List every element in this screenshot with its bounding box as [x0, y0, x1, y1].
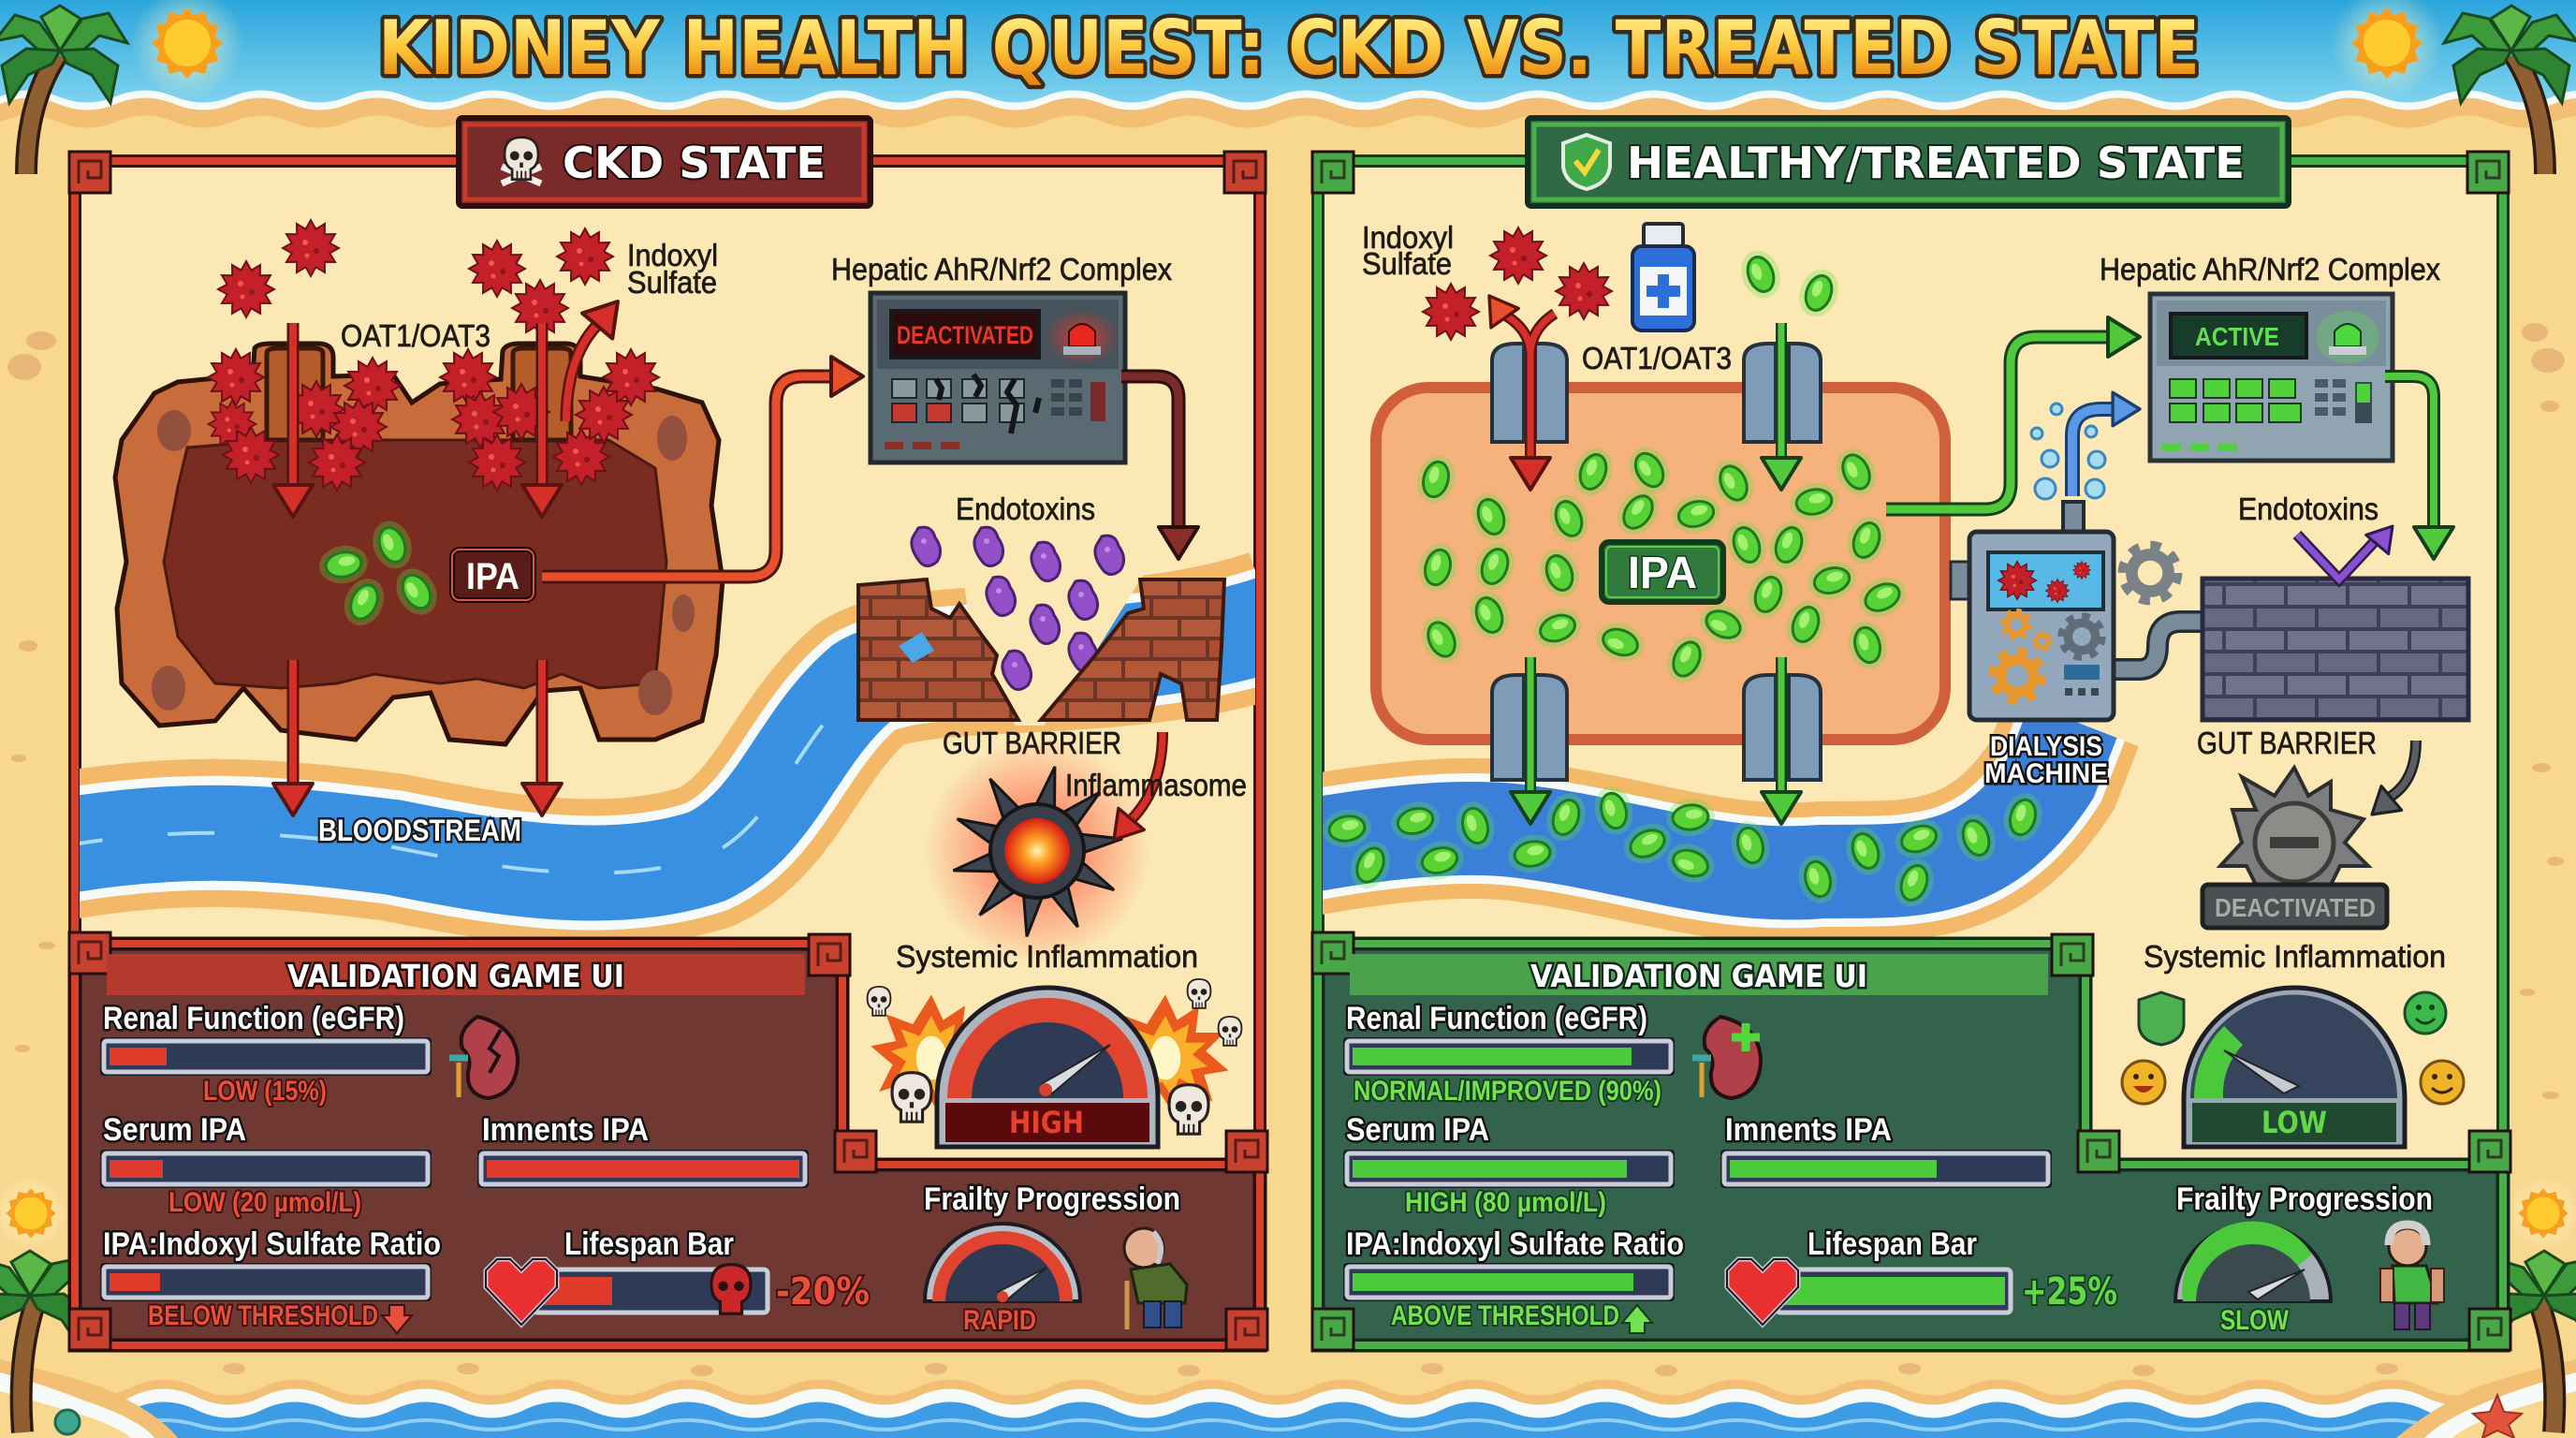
arrow: hepatic complex to gut barrier [2385, 376, 2453, 559]
dialysis bubbles and clean flow arrow [2031, 392, 2140, 499]
stat: serum IPA: HIGH (80 µmol/L) [1405, 1187, 1606, 1218]
stat: lifespan bar: -20% [776, 1270, 870, 1313]
frailty progression [924, 1181, 1180, 1336]
indoxyl sulfate toxins [1423, 227, 1612, 340]
icon: skull and crossbones [502, 138, 541, 183]
label: IPA badge [452, 550, 534, 600]
icon: green shell [55, 1410, 80, 1434]
icon: activated inflammasome [925, 739, 1149, 963]
kidney cell: healthy [1372, 384, 1949, 743]
panel: CKD validation game UI [69, 932, 1267, 1350]
label: OAT1/OAT3: OAT1/OAT3 [341, 318, 490, 353]
gauge: systemic inflammation high: HIGH [1009, 1105, 1084, 1140]
label: dialysis machine [1984, 731, 2108, 789]
panel frame and parchment [69, 152, 1266, 1345]
icon: palm tree top left [0, 6, 127, 174]
endotoxin blobs [912, 527, 1124, 690]
dialysis machine [1951, 502, 2204, 720]
stat: renal function [1343, 1001, 1675, 1107]
label: hepatic complex: Hepatic AhR/Nrf2 Complex [831, 252, 1172, 286]
OAT transporters [1492, 344, 1821, 780]
UI header: VALIDATION GAME UI [287, 958, 624, 994]
stat: IPA to indoxyl sulfate ratio [100, 1226, 441, 1333]
stat: lifespan bar [1727, 1226, 2117, 1325]
panel: healthy/treated state [1310, 118, 2510, 1350]
stat: renal function: Renal Function (eGFR) [103, 1001, 404, 1036]
stat: IPA to indoxyl sulfate ratio: IPA:Indoxyl Sulfate Ratio [1346, 1226, 1684, 1262]
label: indoxyl sulfate [1362, 220, 1454, 281]
stat: imnents IPA [477, 1112, 809, 1188]
gauge: systemic inflammation low: Systemic Inflammation [2144, 939, 2446, 974]
gut barrier wall intact [2203, 579, 2468, 720]
stat: renal function: NORMAL/IMPROVED (90%) [1354, 1076, 1661, 1107]
frailty progression: Frailty Progression [924, 1181, 1180, 1217]
stat: imnents IPA [1720, 1112, 2052, 1188]
UI header: VALIDATION GAME UI [1530, 958, 1867, 994]
stat: IPA to indoxyl sulfate ratio: IPA:Indoxyl Sulfate Ratio [103, 1226, 441, 1262]
label: bloodstream: BLOODSTREAM [318, 814, 521, 847]
label: dialysis machine: MACHINE [1984, 758, 2108, 789]
IPA bacteria [316, 516, 445, 632]
arrow: gut barrier to inflammasome [1101, 732, 1163, 850]
icon: damaged kidney [449, 1017, 518, 1098]
gauge: systemic inflammation high: Systemic Inflammation [896, 939, 1198, 974]
frailty progression: SLOW [2220, 1305, 2290, 1336]
indoxyl sulfate toxins [208, 220, 659, 491]
label: IPA badge [1602, 542, 1723, 602]
stat: lifespan bar [486, 1226, 870, 1325]
stat: serum IPA: LOW (20 µmol/L) [168, 1187, 361, 1218]
control panel: active: ACTIVE [2195, 322, 2279, 351]
stat: lifespan bar: +25% [2022, 1270, 2117, 1313]
label: gut barrier: GUT BARRIER [2197, 726, 2377, 760]
stat: IPA to indoxyl sulfate ratio: BELOW THRESHOLD [148, 1300, 378, 1331]
panel: CKD state [56, 118, 1273, 1350]
bloodstream river [1310, 721, 2073, 873]
badge: healthy/treated state: HEALTHY/TREATED STATE [1627, 138, 2245, 188]
label: indoxyl sulfate: Sulfate [627, 265, 717, 300]
frailty progression [2175, 1181, 2433, 1336]
label: IPA badge: IPA [1628, 549, 1697, 598]
label: indoxyl sulfate: Indoxyl [627, 238, 718, 272]
gauge: systemic inflammation high [868, 939, 1241, 1147]
stat: IPA to indoxyl sulfate ratio: ABOVE THRESHOLD [1391, 1300, 1619, 1331]
arrow: IPA to hepatic complex [542, 357, 863, 577]
arrows through cell [1475, 286, 1801, 824]
label: indoxyl sulfate [627, 238, 718, 300]
badge: CKD state: CKD STATE [563, 138, 826, 188]
icon: healed kidney [1692, 1017, 1761, 1098]
icon: deactivated inflammasome [2220, 768, 2368, 885]
arrow: IPA to hepatic complex [1886, 317, 2140, 509]
frailty progression: Frailty Progression [2176, 1181, 2433, 1217]
control panel: deactivated [871, 293, 1125, 462]
icon: sun top right [2331, 0, 2443, 99]
stat: lifespan bar: Lifespan Bar [564, 1226, 734, 1262]
gauge: systemic inflammation low [2122, 939, 2464, 1147]
stat: IPA to indoxyl sulfate ratio [1343, 1226, 1684, 1333]
icon: medicine bottle [1632, 224, 1694, 330]
label: OAT1/OAT3: OAT1/OAT3 [1582, 341, 1732, 375]
icon: starfish [2473, 1395, 2522, 1438]
label: gut barrier: GUT BARRIER [943, 726, 1121, 760]
icon: palm tree bottom right [2479, 1251, 2576, 1432]
kidney: damaged tissue [115, 344, 723, 744]
label: deactivated: DEACTIVATED [2215, 893, 2376, 922]
arrow: barrier to deactivated inflammasome [2362, 741, 2416, 827]
panel frame and parchment [1312, 152, 2509, 1345]
stat: renal function: LOW (15%) [203, 1076, 327, 1107]
stat: serum IPA: Serum IPA [1346, 1112, 1489, 1148]
stat: serum IPA [100, 1112, 432, 1218]
broken gut barrier wall [858, 580, 1224, 720]
stat: serum IPA [1343, 1112, 1675, 1218]
label: indoxyl sulfate: Indoxyl [1362, 220, 1454, 255]
icon: strong elderly person [2380, 1225, 2444, 1329]
label: hepatic complex: Hepatic AhR/Nrf2 Complex [2100, 252, 2440, 286]
label: inflammasome: Inflammasome [1065, 768, 1247, 802]
label: deactivated [2203, 885, 2387, 928]
badge: CKD state [459, 118, 871, 206]
stat: serum IPA: Serum IPA [103, 1112, 246, 1148]
control panel: active [2150, 294, 2393, 461]
arrows through kidney [273, 289, 633, 815]
title: KIDNEY HEALTH QUEST: CKD VS. TREATED STATE [378, 5, 2200, 92]
label: IPA badge: IPA [466, 556, 520, 597]
frailty progression: RAPID [963, 1305, 1036, 1336]
icon: shield with check [1563, 135, 1610, 189]
label: endotoxins: Endotoxins [956, 492, 1095, 526]
icon: palm tree bottom left [0, 1251, 97, 1432]
arrow: hepatic complex to gut barrier [1121, 376, 1198, 559]
label: dialysis machine: DIALYSIS [1990, 731, 2102, 762]
gauge: systemic inflammation low: LOW [2261, 1105, 2327, 1140]
icon: sun top left [131, 0, 243, 99]
stat: renal function: Renal Function (eGFR) [1346, 1001, 1647, 1036]
control panel: deactivated: DEACTIVATED [897, 321, 1033, 349]
UI header [107, 954, 805, 995]
label: endotoxins: Endotoxins [2238, 492, 2378, 526]
badge: healthy/treated state [1528, 118, 2289, 206]
stat: imnents IPA: Imnents IPA [1725, 1112, 1892, 1148]
icon: small sun left [0, 1174, 70, 1253]
icon: palm tree top right [2444, 6, 2576, 174]
stat: renal function [100, 1001, 432, 1107]
IPA bacteria [1320, 245, 2047, 912]
stat: imnents IPA: Imnents IPA [482, 1112, 649, 1148]
label: indoxyl sulfate: Sulfate [1362, 246, 1452, 281]
icon: frail elderly person [1124, 1228, 1187, 1329]
bloodstream river [56, 562, 1273, 873]
icon: small sun right [2504, 1174, 2576, 1253]
arrow: endotoxins deflected [2297, 517, 2404, 580]
UI header [1350, 954, 2048, 995]
panel: treated validation game UI [1312, 932, 2510, 1350]
stat: lifespan bar: Lifespan Bar [1808, 1226, 1977, 1262]
